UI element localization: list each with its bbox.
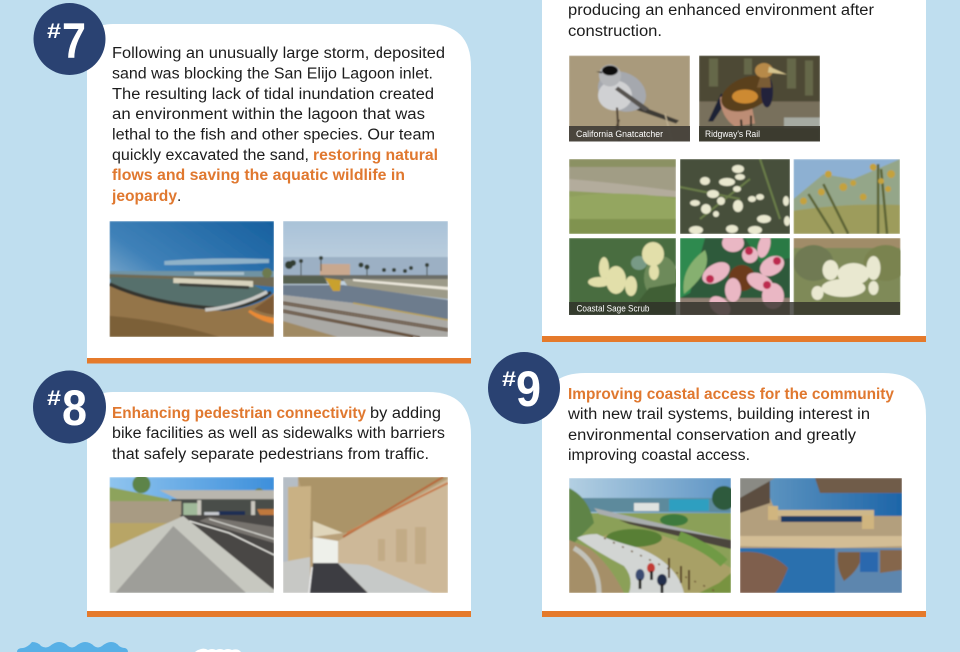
panel 7 body text: an environment within the lagoon that was [112, 106, 425, 123]
tile: yellow shrub [794, 159, 900, 234]
panel 8 card [87, 392, 471, 611]
upper right body text [568, 2, 874, 40]
panel: habitat enhancement (continued) [542, 0, 926, 342]
upper right card [542, 0, 926, 336]
photo: aerial of lagoon bridge [740, 478, 902, 593]
badge: #8: # [47, 387, 61, 410]
caption strip: coastal sage scrub [569, 302, 900, 315]
panel 8 body text: that safely separate pedestrians from traffic. [112, 446, 429, 463]
panel 9 body text [567, 386, 894, 464]
caption: Coastal Sage Scrub: Coastal Sage Scrub [576, 304, 650, 314]
photo: underpass with textured wall [283, 477, 448, 593]
panel 8 body text: by adding [370, 405, 441, 422]
panel: #9 coastal access [542, 373, 926, 617]
photo: Ridgway's Rail [699, 56, 820, 142]
panel 7 body text: flows and saving the aquatic wildlife in [112, 167, 405, 184]
tile: cream laurel sumac [569, 238, 676, 315]
panel 7 body text: sand was blocking the San Elijo Lagoon inlet. [112, 66, 433, 82]
panel 7 body text: . [177, 188, 181, 205]
badge: #9: 9 [516, 361, 541, 417]
photo: lagoon inlet wide view [110, 221, 274, 337]
tile: pink lemonade berry [680, 238, 790, 315]
badge: #9: # [502, 368, 516, 391]
panel: #8 pedestrian connectivity [87, 392, 471, 617]
panel 9 card [542, 373, 926, 611]
panel 8 body text: bike facilities as well as sidewalks with barriers [112, 425, 445, 442]
badge: #7: # [47, 20, 61, 43]
badge: #7 [34, 3, 106, 75]
panel 7 body text [111, 45, 445, 205]
panel 7 body text: Following an unusually large storm, deposited [112, 45, 445, 62]
upper right body text: construction. [568, 23, 662, 40]
tile: flowering shrub [794, 238, 900, 315]
upper right body text: producing an enhanced environment after [568, 2, 874, 19]
panel 7 body text: jeopardy [111, 188, 177, 205]
tile: white buckwheat [680, 159, 790, 234]
photo: cyclists on coastal trail [569, 478, 731, 593]
caption: Ridgway's Rail: Ridgway's Rail [705, 129, 760, 139]
panel 7 body text: quickly excavated the sand, [112, 147, 309, 164]
badge: #7: 7 [62, 13, 86, 69]
decoration: blue wave [17, 642, 128, 652]
upper right orange rule [542, 336, 926, 342]
caption strip: gnatcatcher [569, 126, 690, 142]
panel 9 body text: Improving coastal access for the community [568, 386, 894, 403]
panel 7 body text: restoring natural [313, 147, 438, 164]
photo grid: coastal sage scrub [569, 159, 908, 320]
panel 7 orange rule [87, 358, 471, 364]
panel: #7 storm response [87, 24, 471, 364]
badge: #8: 8 [62, 380, 87, 436]
panel 8 body text [112, 405, 445, 463]
panel 7 body text: The resulting lack of tidal inundation created [112, 86, 434, 103]
badge: #8 [33, 370, 106, 444]
badge: #9 [488, 352, 560, 424]
photo: excavation beside railway [283, 221, 448, 337]
caption strip: rail [699, 126, 820, 142]
panel 9 body text: environmental conservation and greatly [568, 427, 856, 444]
photo: California Gnatcatcher [569, 56, 690, 142]
panel 7 card [87, 24, 471, 358]
panel 7 body text: lethal to the fish and other species. Our team [112, 126, 435, 144]
decoration: white wave [195, 649, 241, 652]
panel 9 orange rule [542, 611, 926, 617]
panel 9 body text: improving coastal access. [568, 447, 750, 464]
panel 8 orange rule [87, 611, 471, 617]
panel 9 body text: with new trail systems, building interest in [567, 406, 870, 423]
photo: road and sidewalk under overpass [110, 477, 274, 593]
panel 8 body text: Enhancing pedestrian connectivity [112, 405, 366, 422]
caption: California Gnatcatcher: California Gnatcatcher [576, 129, 663, 139]
tile: grass [569, 159, 676, 234]
